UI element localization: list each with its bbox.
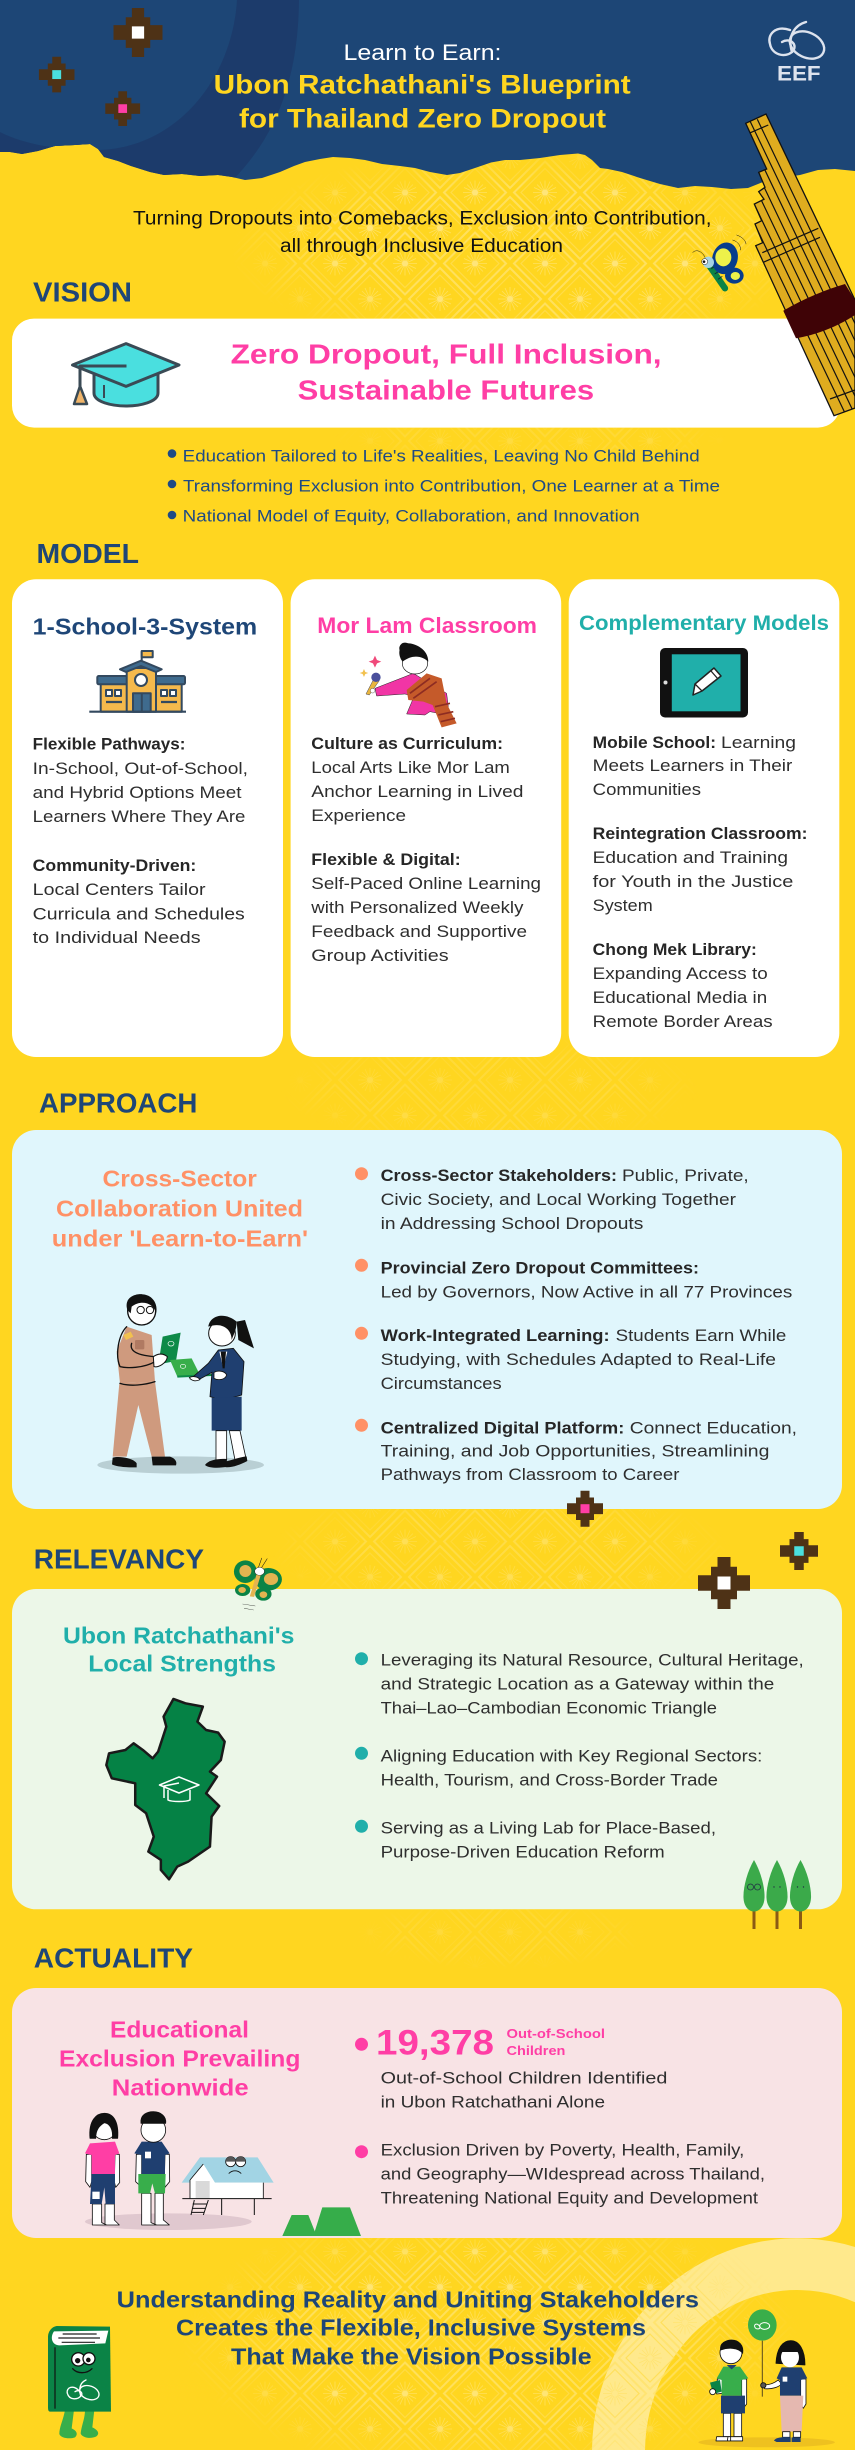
actuality heading: Nationwide [112, 2075, 249, 2101]
panel: relevancy [12, 1589, 842, 1909]
text: flexible and digital: Feedback and Supportive [311, 922, 527, 941]
icon: khaen bamboo instrument [744, 113, 855, 416]
header banner with torn edge [0, 0, 855, 189]
approach heading [52, 1166, 308, 1252]
closing statement: Creates the Flexible, Inclusive Systems [176, 2315, 646, 2341]
icon: green butterfly [234, 1558, 282, 1610]
footer ring decoration [592, 2238, 855, 2450]
heading: Complementary Models: Complementary Models [579, 612, 829, 635]
text: flexible and digital: with Personalized Weekly [310, 898, 524, 917]
item: provincial committees: Provincial Zero Dropout Committees: [381, 1258, 699, 1277]
vision bullet list: Transforming Exclusion into Contribution, One Learner at a Time [183, 476, 720, 495]
item: leveraging strengths [355, 1650, 804, 1717]
panel: approach [12, 1130, 842, 1509]
text: community-driven: Local Centers Tailor [33, 880, 206, 899]
icon: decorative diamond pink [105, 91, 140, 126]
vision statement [231, 339, 662, 405]
actuality heading [59, 2017, 300, 2101]
heading: model: MODEL [36, 538, 139, 569]
text: mobile school: Mobile School: [593, 733, 716, 752]
list: approach items [355, 1166, 797, 1484]
icon: decorative diamond white [698, 1557, 750, 1609]
item: exclusion drivers [355, 2140, 765, 2207]
list: relevancy items [355, 1650, 804, 1861]
title [214, 40, 631, 134]
item: cross-sector stakeholders: Civic Society, and Local Working Together [381, 1190, 736, 1209]
icon: graduation cap [72, 344, 179, 406]
heading: relevancy: RELEVANCY [34, 1543, 204, 1574]
text: flexible and digital: Flexible & Digital: [311, 850, 461, 869]
logo: EEF [769, 22, 829, 86]
stat: 19,378 out-of-school children: in Ubon Ratchathani Alone [381, 2092, 605, 2111]
illustration: two children with balloon [698, 2309, 835, 2447]
icon: blue butterfly [693, 235, 746, 288]
item: work-integrated learning: Studying, with Schedules Adapted to Real-Life [381, 1350, 776, 1369]
text: flexible pathways: Learners Where They Are [33, 807, 245, 826]
item: work-integrated learning: Students Earn While [616, 1326, 786, 1345]
text: reintegration classroom: System [593, 896, 653, 915]
text: chong mek library: Chong Mek Library: [593, 940, 757, 959]
heading: actuality: ACTUALITY [34, 1942, 193, 1973]
icon: decorative diamond pink [567, 1491, 603, 1527]
text: mobile school: Communities [593, 780, 701, 799]
item: provincial committees: Led by Governors, Now Active in all 77 Provinces [381, 1282, 792, 1301]
vision bullet list: Education Tailored to Life's Realities, Leaving No Child Behind [183, 446, 700, 465]
text: community-driven: Curricula and Schedules [33, 904, 245, 923]
text: community-driven: Community-Driven: [33, 856, 196, 875]
stat: 19,378 out-of-school children [355, 2023, 667, 2111]
item: cross-sector stakeholders [355, 1166, 749, 1233]
text: mobile school [593, 733, 796, 799]
text: culture as curriculum: Local Arts Like Mor Lam [311, 758, 510, 777]
item: work-integrated learning [355, 1326, 786, 1393]
panel: Mor Lam Classroom [291, 579, 561, 1057]
icon: three smiling trees [743, 1860, 811, 1929]
text: culture as curriculum: Culture as Curriculum: [311, 734, 503, 753]
stat: 19,378 out-of-school children: Out-of-School [506, 2026, 605, 2041]
text: community-driven: to Individual Needs [33, 928, 201, 947]
title: Learn to Earn: [344, 40, 502, 65]
text: chong mek library: Educational Media in [593, 988, 767, 1007]
panel: vision [12, 319, 840, 428]
item: centralized digital platform: Centralized Digital Platform: [381, 1418, 624, 1437]
item: leveraging strengths: Leveraging its Natural Resource, Cultural Heritage, [381, 1650, 804, 1669]
item: cross-sector stakeholders: Cross-Sector Stakeholders: [381, 1166, 617, 1185]
item: cross-sector stakeholders: Public, Private, [622, 1166, 749, 1185]
stat: 19,378 out-of-school children: Out-of-School Children Identified [381, 2068, 667, 2087]
item: exclusion drivers: Exclusion Driven by Poverty, Health, Family, [381, 2140, 744, 2159]
item: living lab [355, 1818, 716, 1861]
illustration: officer and student with documents [97, 1294, 264, 1474]
text: reintegration classroom [593, 824, 808, 915]
item: aligning education: Aligning Education with Key Regional Sectors: [381, 1746, 762, 1765]
text: culture as curriculum: Anchor Learning in Lived [311, 782, 523, 801]
vision bullet list: National Model of Equity, Collaboration, and Innovation [183, 506, 640, 525]
icon: tablet with pencil [660, 648, 748, 718]
map: Ubon Ratchathani province [106, 1699, 225, 1879]
heading: 1-School-3-System: 1-School-3-System [33, 614, 257, 640]
subtitle: Turning Dropouts into Comebacks, Exclusion into Contribution, [133, 208, 712, 229]
text: flexible and digital [310, 850, 541, 965]
text: reintegration classroom: Education and Training [593, 848, 788, 867]
text: mobile school: Learning [721, 733, 796, 752]
panel: Complementary Models [569, 579, 839, 1057]
vision bullet list [168, 446, 720, 525]
closing statement: Understanding Reality and Uniting Stakeholders [117, 2286, 699, 2312]
item: work-integrated learning: Work-Integrated Learning: [381, 1326, 610, 1345]
text: flexible and digital: Self-Paced Online Learning [311, 874, 541, 893]
relevancy heading: Ubon Ratchathani's [63, 1622, 294, 1648]
item: centralized digital platform: Training, and Job Opportunities, Streamlining [381, 1442, 769, 1461]
heading: Mor Lam Classroom: Mor Lam Classroom [317, 613, 537, 638]
approach heading: Collaboration United [56, 1196, 303, 1222]
item: living lab: Purpose-Driven Education Reform [381, 1842, 665, 1861]
panel: actuality [12, 1988, 842, 2238]
text: flexible pathways [33, 735, 248, 826]
icon: school [89, 651, 186, 712]
text: chong mek library [593, 940, 773, 1031]
panel: 1-School-3-System [12, 579, 283, 1057]
text: flexible pathways: and Hybrid Options Meet [33, 783, 242, 802]
vision statement: Zero Dropout, Full Inclusion, [231, 339, 662, 370]
item: leveraging strengths: Thai–Lao–Cambodian Economic Triangle [381, 1698, 717, 1717]
item: work-integrated learning: Circumstances [381, 1374, 502, 1393]
actuality heading: Exclusion Prevailing [59, 2046, 300, 2072]
heading: vision: VISION [33, 276, 132, 307]
logo: EEF: EEF [777, 63, 821, 86]
text: flexible and digital: Group Activities [311, 946, 449, 965]
text: chong mek library: Expanding Access to [593, 964, 768, 983]
closing statement [117, 2286, 699, 2370]
actuality heading: Educational [110, 2017, 249, 2043]
text: chong mek library: Remote Border Areas [593, 1012, 773, 1031]
item: provincial committees [355, 1258, 792, 1301]
item: leveraging strengths: and Strategic Location as a Gateway within the [381, 1674, 774, 1693]
icon: green book character [48, 2326, 111, 2438]
item: centralized digital platform: Connect Education, [630, 1418, 797, 1437]
stat: 19,378 out-of-school children: 19,378 [376, 2023, 494, 2062]
illustration: two children and a sad house [85, 2112, 361, 2236]
approach heading: under 'Learn-to-Earn' [52, 1226, 308, 1252]
heading: approach: APPROACH [39, 1087, 197, 1118]
item: exclusion drivers: Threatening National Equity and Development [381, 2188, 758, 2207]
text: culture as curriculum: Experience [311, 806, 406, 825]
text: reintegration classroom: for Youth in the Justice [593, 872, 793, 891]
icon: mor lam singer [360, 643, 457, 727]
item: aligning education [355, 1746, 762, 1789]
title: Ubon Ratchathani's Blueprint [214, 70, 631, 100]
relevancy heading [63, 1622, 294, 1677]
subtitle: all through Inclusive Education [280, 236, 563, 257]
text: culture as curriculum [311, 734, 523, 825]
icon: decorative diamond cyan [780, 1532, 818, 1570]
subtitle [133, 208, 712, 257]
closing statement: That Make the Vision Possible [231, 2344, 592, 2370]
stat: 19,378 out-of-school children: Children [506, 2043, 565, 2058]
title: for Thailand Zero Dropout [239, 104, 606, 134]
text: reintegration classroom: Reintegration Classroom: [593, 824, 808, 843]
text: mobile school: Meets Learners in Their [593, 756, 793, 775]
approach heading: Cross-Sector [102, 1166, 257, 1192]
icon: decorative diamond cyan [39, 57, 74, 92]
text: flexible pathways: Flexible Pathways: [33, 735, 185, 754]
item: centralized digital platform: Pathways from Classroom to Career [381, 1465, 680, 1484]
item: cross-sector stakeholders: in Addressing School Dropouts [381, 1214, 643, 1233]
text: flexible pathways: In-School, Out-of-School, [33, 759, 248, 778]
item: aligning education: Health, Tourism, and Cross-Border Trade [381, 1770, 718, 1789]
item: centralized digital platform [355, 1418, 797, 1484]
item: exclusion drivers: and Geography—WIdespread across Thailand, [381, 2164, 765, 2183]
relevancy heading: Local Strengths [88, 1651, 276, 1677]
vision statement: Sustainable Futures [298, 374, 594, 405]
item: living lab: Serving as a Living Lab for Place-Based, [381, 1818, 716, 1837]
icon: decorative diamond white [114, 8, 162, 57]
text: community-driven [33, 856, 245, 947]
